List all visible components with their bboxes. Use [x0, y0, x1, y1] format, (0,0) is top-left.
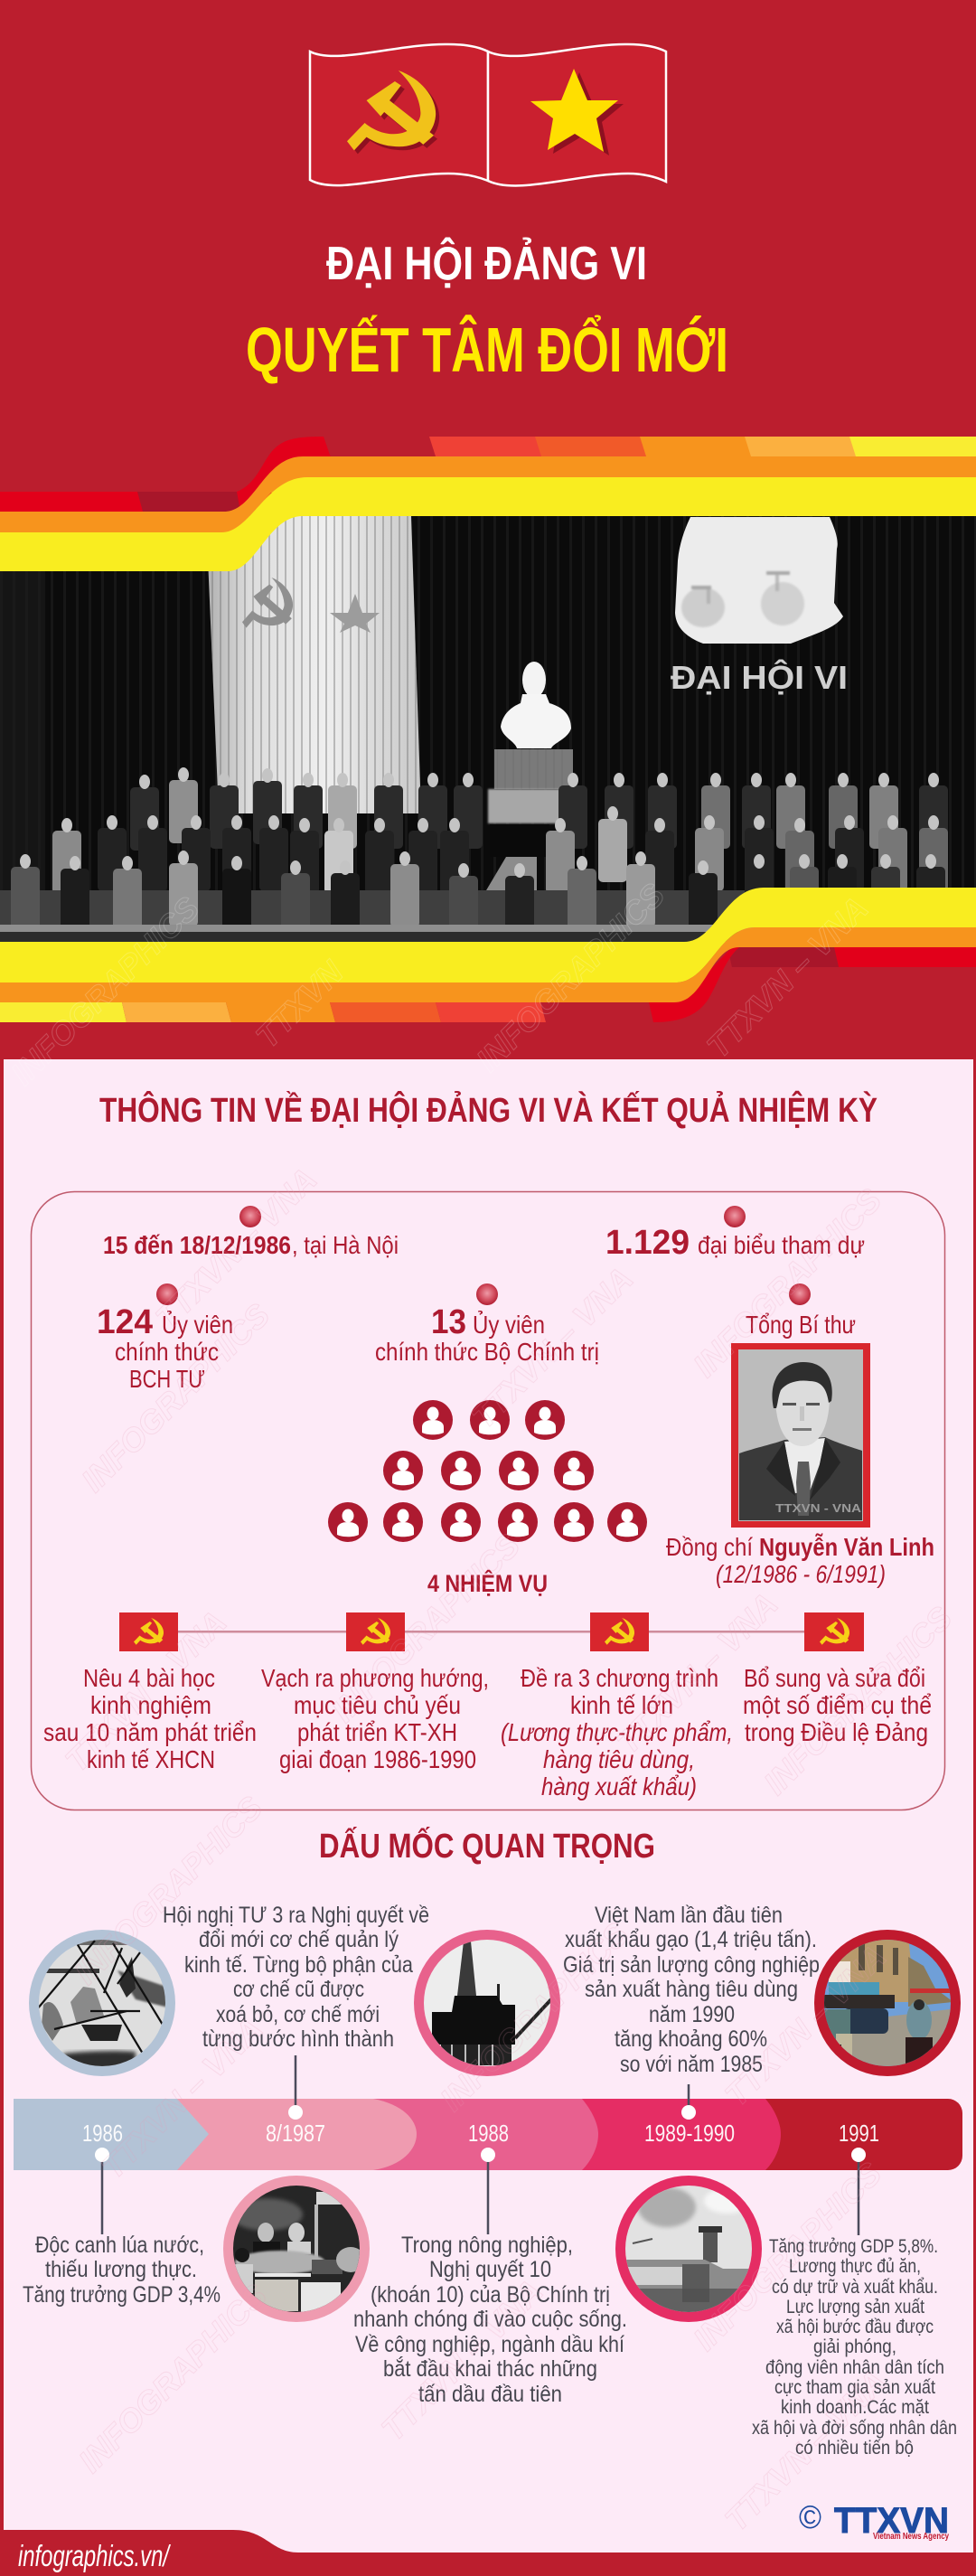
logo: TTXVN: Vietnam News Agency [873, 2532, 949, 2542]
fact: general secretary [666, 1283, 934, 1588]
text: 1986 milestone [23, 2233, 221, 2308]
text: 1991 milestone: giải phóng, [813, 2336, 896, 2357]
text: 1989-1990 milestone: Giá trị sản lượng công nghiệp [563, 1952, 820, 1978]
delegates [0, 767, 976, 942]
photo: 1991 street [814, 1930, 961, 2076]
task 4: Bổ sung và sửa đổi [744, 1664, 925, 1692]
segment 1989-1990 [542, 2099, 781, 2170]
portrait: TTXVN - VNA [775, 1501, 862, 1515]
text: 1991 milestone: kinh doanh.Các mặt [781, 2397, 929, 2418]
text: 1988 milestone: (khoán 10) của Bộ Chính trị [371, 2282, 610, 2308]
connector line [178, 1631, 804, 1632]
fact: central committee: BCH TƯ [129, 1365, 205, 1393]
timeline labels [82, 2120, 879, 2147]
task 1: kinh tế XHCN [87, 1745, 215, 1773]
watermark on red [4, 876, 875, 1092]
task 3: Đề ra 3 chương trình [521, 1664, 718, 1692]
segment 8/1987 [172, 2099, 417, 2170]
task 2: giai đoạn 1986-1990 [279, 1745, 476, 1773]
text: 1991 milestone: cực tham gia sản xuất [774, 2377, 935, 2398]
task 1: Nêu 4 bài học [83, 1664, 215, 1692]
watermark [58, 1161, 959, 2538]
portrait [731, 1343, 870, 1528]
title [246, 237, 728, 385]
timeline labels: 1989-1990 [644, 2120, 735, 2147]
photo: congress hall [0, 516, 976, 942]
segment 1986 [14, 2099, 209, 2170]
text: 1988 milestone: nhanh chóng đi vào cuộc sống. [353, 2307, 627, 2332]
logo: TTXVN [799, 2498, 949, 2542]
text: 8/1987 milestone: đổi mới cơ chế quản lý [199, 1927, 399, 1952]
watermark: TTXVN – VNA [374, 2272, 549, 2448]
watermark: TTXVN – VNA [148, 1161, 324, 1336]
bottom ribbon [0, 888, 976, 1022]
text: 1991 milestone: Lực lượng sản xuất [786, 2297, 924, 2317]
fact: central committee: 124 [97, 1303, 153, 1341]
fact: general secretary: Đồng chí [666, 1533, 753, 1561]
watermark: TTXVN – VNA [58, 1603, 233, 1779]
text: 8/1987 milestone: cơ chế cũ được [233, 1977, 364, 2002]
text: 1989-1990 milestone [563, 1903, 820, 2077]
text: 1991 milestone: có nhiều tiến bộ [795, 2438, 914, 2458]
fact: delegates: đại biểu tham dự [698, 1231, 865, 1259]
task 3: (Lương thực-thực phẩm, [501, 1718, 733, 1746]
title: ĐẠI HỘI ĐẢNG VI [326, 237, 647, 290]
fact: politburo: Ủy viên [473, 1310, 545, 1339]
fact: delegates: 1.129 [605, 1224, 690, 1262]
watermark on red: INFOGRAPHICS [4, 889, 206, 1092]
watermark: INFOGRAPHICS [324, 1527, 527, 1729]
task 1: sau 10 năm phát triển [43, 1718, 257, 1746]
task 3: hàng tiêu dùng, [543, 1745, 695, 1773]
fact: politburo [375, 1283, 599, 1366]
text: 1989-1990 milestone: Việt Nam lần đầu tiên [595, 1903, 783, 1928]
task 2 [261, 1612, 489, 1773]
text: 8/1987 milestone [163, 1903, 429, 2052]
pink content panel [4, 1059, 973, 2552]
logo: TTXVN: © [799, 2498, 821, 2535]
panel: congress facts [31, 1191, 945, 1810]
title: QUYẾT TÂM ĐỔI MỚI [246, 314, 728, 385]
icon: hammer and sickle [347, 71, 439, 154]
photo: 1988 oil rig [414, 1930, 560, 2076]
timeline labels: 1988 [468, 2120, 509, 2147]
bust [486, 662, 573, 890]
text: 1991 milestone: Lương thực đủ ăn, [789, 2256, 921, 2277]
watermark: INFOGRAPHICS [686, 1181, 888, 1384]
footer url: infographics.vn/ [18, 2539, 171, 2572]
task 2: mục tiêu chủ yếu [294, 1691, 461, 1719]
fact: general secretary: Tổng Bí thư [746, 1311, 856, 1339]
photo: factory [615, 2176, 762, 2322]
text: 1989-1990 milestone: tăng khoảng 60% [615, 2026, 767, 2052]
task 1: kinh nghiệm [90, 1691, 211, 1719]
watermark on red: TTXVN [249, 953, 351, 1055]
text: 1991 milestone [752, 2236, 957, 2458]
text: 1986 milestone: Độc canh lúa nước, [35, 2233, 204, 2258]
text: 1986 milestone: thiếu lương thực. [45, 2257, 197, 2282]
watermark: INFOGRAPHICS [756, 1599, 959, 1801]
text: 8/1987 milestone: xoá bỏ, cơ chế mới [216, 2002, 380, 2027]
task 2: phát triển KT-XH [297, 1718, 457, 1746]
text: 8/1987 milestone: từng bước hình thành [202, 2026, 394, 2052]
icon: star [530, 69, 624, 155]
connectors and dots [95, 2055, 866, 2235]
text: 8/1987 milestone: kinh tế. Từng bộ phận của [184, 1952, 413, 1978]
watermark: INFOGRAPHICS [71, 2277, 274, 2479]
task 4: trong Điều lệ Đảng [745, 1718, 928, 1746]
fact: politburo: chính thức Bộ Chính trị [375, 1338, 599, 1366]
text: 1991 milestone: có dự trữ và xuất khẩu. [772, 2277, 938, 2298]
subheading: 4 tasks: 4 NHIỆM VỤ [427, 1569, 548, 1597]
timeline labels: 8/1987 [266, 2120, 325, 2147]
fact: central committee [97, 1283, 233, 1393]
text: 1991 milestone: xã hội bước đầu được [776, 2317, 934, 2337]
timeline labels: 1991 [839, 2120, 879, 2147]
fact: dates: , tại Hà Nội [292, 1231, 399, 1259]
watermark: TTXVN – VNA [718, 2363, 893, 2538]
task 4 [743, 1612, 932, 1746]
icons: 13 politburo members [328, 1400, 647, 1542]
watermark: TTXVN – VNA [718, 1938, 893, 2113]
emblem flags [310, 44, 666, 186]
watermark: INFOGRAPHICS [686, 2155, 888, 2357]
top ribbon [0, 437, 976, 571]
heading: milestones: DẤU MỐC QUAN TRỌNG [319, 1825, 655, 1866]
text: 1988 milestone: Về công nghiệp, ngành dầu khí [355, 2332, 624, 2357]
task 1 [43, 1612, 257, 1773]
text: 1988 milestone: Trong nông nghiệp, [401, 2233, 573, 2258]
text: 1988 milestone: bắt đầu khai thác những [383, 2355, 597, 2382]
segment 1991 [723, 2099, 962, 2170]
fact: dates [103, 1206, 399, 1259]
text: 1986 milestone: Tăng trưởng GDP 3,4% [23, 2282, 221, 2308]
fact: central committee: Ủy viên [162, 1310, 233, 1339]
watermark: INFOGRAPHICS [74, 1296, 277, 1499]
watermark on red: TTXVN – VNA [699, 889, 875, 1065]
text: 1988 milestone: Nghị quyết 10 [429, 2257, 551, 2282]
logo: TTXVN: TTXVN [834, 2501, 949, 2541]
photo: 1986 fishing [29, 1930, 175, 2076]
fact: central committee: chính thức [115, 1338, 219, 1366]
watermark: INFOGRAPHICS [433, 1915, 635, 2118]
text: 1989-1990 milestone: năm 1990 [649, 2002, 735, 2027]
watermark: TTXVN – VNA [465, 1260, 640, 1435]
task 3: hàng xuất khẩu) [541, 1772, 697, 1800]
text: 1991 milestone: Tăng trưởng GDP 5,8%. [769, 2236, 938, 2257]
fact: delegates [605, 1206, 865, 1262]
task 4: một số điểm cụ thể [743, 1691, 932, 1719]
watermark: TTXVN – VNA [609, 1585, 784, 1761]
curtain backdrop [206, 516, 421, 813]
fact: general secretary: Nguyễn Văn Linh [759, 1533, 934, 1561]
task 3: kinh tế lớn [570, 1691, 673, 1719]
fact: general secretary: (12/1986 - 6/1991) [716, 1560, 886, 1588]
text: 1989-1990 milestone: so với năm 1985 [620, 2052, 763, 2077]
text: 8/1987 milestone: Hội nghị TƯ 3 ra Nghị quyết về [163, 1903, 429, 1928]
task 2: Vạch ra phương hướng, [261, 1664, 489, 1692]
fact: dates: 15 đến 18/12/1986 [103, 1231, 291, 1259]
segment 1988 [361, 2099, 598, 2170]
text: 1989-1990 milestone: sản xuất hàng tiêu dùng [585, 1977, 798, 2002]
text: 1988 milestone: tấn dầu đầu tiên [418, 2382, 562, 2407]
hall sign: ĐẠI HỘI VI [671, 658, 848, 696]
text: 1991 milestone: động viên nhân dân tích [765, 2357, 944, 2378]
text: 1988 milestone [353, 2233, 627, 2407]
text: 1989-1990 milestone: xuất khẩu gạo (1,4 triệu tấn). [565, 1927, 817, 1952]
task 3 [501, 1612, 733, 1800]
photo: market stall [223, 2176, 370, 2322]
timeline labels: 1986 [82, 2120, 123, 2147]
Marx Lenin relief [675, 517, 843, 644]
watermark on red: INFOGRAPHICS [469, 876, 671, 1078]
watermark: INFOGRAPHICS [67, 1789, 269, 1991]
timeline bar [14, 2099, 962, 2170]
fact: politburo: 13 [431, 1303, 466, 1341]
watermark: TTXVN – VNA [94, 2010, 269, 2186]
